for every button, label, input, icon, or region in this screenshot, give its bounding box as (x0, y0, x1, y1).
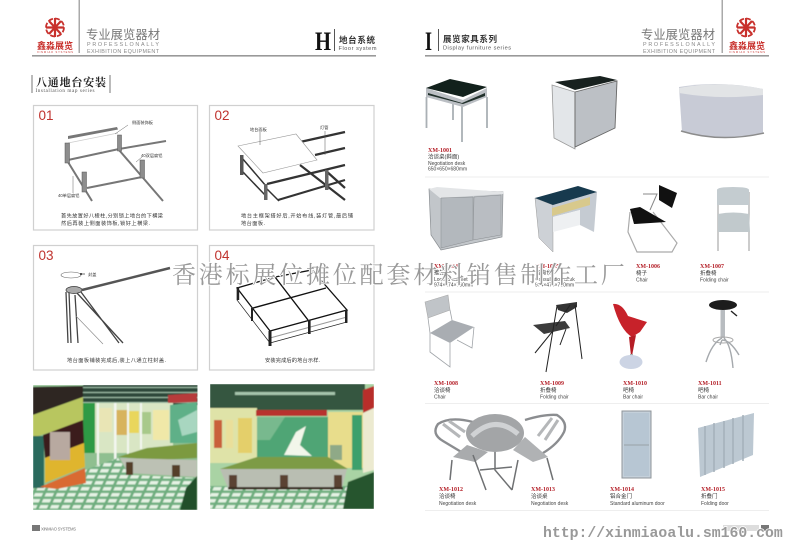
product: XM-1008 chair: XM-1008 (434, 381, 458, 387)
diagram: frame with posts (65, 125, 166, 201)
product: XM-1001 desk (426, 79, 487, 172)
product: XM-1001 desk: 650×650×680mm (428, 166, 467, 172)
panel: step 02 (210, 106, 374, 230)
product: XM-1010 bar chair: 吧椅 (623, 386, 635, 394)
product: XM-1012 and XM-1013 table with chairs: 洽谈椅 (439, 492, 456, 500)
product: XM-1014 aluminium door: Standard aluminum door (610, 501, 665, 507)
section heading: floor system: Floor system (338, 46, 377, 52)
product: XM-1012 and XM-1013 table with chairs: XM-1013 (531, 487, 555, 493)
panel: step 04: 04 (214, 248, 230, 263)
product: XM-1014 aluminium door (610, 411, 665, 507)
product: XM-1009 folding chair (533, 302, 582, 400)
heading: installation: Installation map series (36, 88, 94, 94)
product: XM-1010 bar chair: XM-1010 (623, 381, 647, 387)
panel: step 03: 地台面板铺装完成后,装上八通立柱封盖. (67, 356, 166, 364)
caption: 地台面板. (241, 219, 265, 227)
product: XM-1007 folding chair (700, 187, 750, 284)
section heading: floor system: H (315, 27, 331, 56)
section heading: display furniture: 展览家具系列 (443, 34, 497, 44)
product: XM-1001 desk: Negotiation desk (428, 161, 466, 167)
product: XM-1007 folding chair: 折叠椅 (700, 269, 717, 277)
product: XM-1010 bar chair (613, 304, 647, 400)
product: XM-1011 bar chair: XM-1011 (698, 381, 722, 387)
photo: exhibition hall with column (33, 385, 198, 510)
section heading: display furniture (425, 27, 511, 56)
caption: 地台主框架搭好后,开始布线,装灯管,最后铺 (241, 212, 353, 220)
panel: step 03: 封盖 (88, 271, 96, 277)
heading: installation (32, 75, 110, 94)
panel: step 01: 40双层扁铝 (141, 152, 162, 159)
diagram: post cap (61, 268, 170, 344)
section heading: floor system: 地台系统 (339, 35, 375, 45)
product: XM-1010 bar chair: Bar chair (623, 394, 643, 400)
caption: 然后再装上侧面装饰板,锁好上横梁. (61, 219, 150, 227)
photo: exhibition hall front view (210, 384, 374, 509)
product: XM-1015 folding door: XM-1015 (701, 487, 725, 493)
right page footer (723, 525, 769, 531)
product: XM-1001 desk: XM-1001 (428, 148, 452, 154)
panel: step 02: 地台面板 (250, 126, 268, 133)
caption: 首先放置好八棱柱,分别锁上地台的下横梁 (61, 212, 163, 220)
product: XM-1012 and XM-1013 table with chairs: Negotiation desk (531, 501, 569, 507)
product: XM-1006 chair (628, 185, 677, 284)
product: XM-1012 and XM-1013 table with chairs (435, 414, 569, 507)
product: XM-1006 chair: 椅子 (636, 269, 648, 277)
product: XM-1005 consultation desk: Consultation desk (535, 277, 575, 283)
product: XM-1005 consultation desk: XM-1005 (535, 264, 559, 270)
product: XM-1004 locker cabinet (429, 187, 504, 288)
left brand text: 专业展览器材 (86, 27, 160, 42)
product: XM-1012 and XM-1013 table with chairs: 洽谈桌 (531, 492, 548, 500)
dividers (425, 176, 769, 511)
left page footer (32, 525, 76, 532)
diagram: assembled floor (237, 270, 347, 346)
caption (241, 212, 353, 227)
left page header (32, 0, 377, 57)
icon: right logo: XINMIAO SYSTEMS (729, 50, 765, 54)
left page footer: XINMIAO SYSTEMS (41, 526, 76, 532)
panel: step 04 (210, 246, 374, 370)
product: XM-1008 chair: Chair (434, 394, 446, 400)
product: XM-1007 folding chair: XM-1007 (700, 264, 724, 270)
product: XM-1008 chair: 洽谈椅 (434, 386, 451, 394)
icon: left logo (37, 18, 73, 54)
section heading: display furniture: Display furniture series (443, 46, 511, 52)
product: XM-1005 consultation desk (535, 186, 597, 288)
watermark: factory slogan: 香港标展位摊位配套材料销售制作工厂 (172, 262, 628, 289)
icon: right logo (729, 18, 765, 54)
panel: step 04: 安装完成后的地台示样. (265, 356, 320, 364)
product: XM-1011 bar chair: Bar chair (698, 394, 718, 400)
product: XM-1009 folding chair: 折叠椅 (540, 386, 557, 394)
product: XM-1009 folding chair: XM-1009 (540, 381, 564, 387)
icon: left logo: 鑫淼展览 (37, 40, 73, 51)
product: XM-1005 consultation desk: 咨询台 (535, 268, 552, 276)
product: XM-1006 chair: XM-1006 (636, 264, 660, 270)
panel: step 03 (34, 246, 198, 370)
product: XM-1012 and XM-1013 table with chairs: XM-1012 (439, 487, 463, 493)
product: XM-1014 aluminium door: 铝合金门 (610, 492, 632, 500)
product: XM-1012 and XM-1013 table with chairs: Negotiation desk (439, 501, 477, 507)
product: XM-1006 chair: Chair (636, 278, 648, 284)
product: XM-1011 bar chair: 吧椅 (698, 386, 710, 394)
product: XM-1015 folding door (698, 413, 754, 507)
product: XM-1015 folding door: Folding door (701, 501, 729, 507)
product: XM-1001 desk: 洽谈桌(斜面) (428, 152, 459, 160)
diagram: panel on frame (238, 131, 345, 201)
panel: step 03: 03 (38, 248, 54, 263)
product: XM-1004 locker cabinet: Locked cabinet (434, 277, 468, 283)
panel: step 02: 灯管 (320, 124, 328, 131)
left brand text: PROFESSLONALLY (87, 42, 159, 48)
panel: step 01: 01 (38, 108, 54, 123)
product: XM-1015 folding door: 折叠门 (701, 492, 718, 500)
left brand text (86, 27, 160, 55)
product: XM-1009 folding chair: Folding chair (540, 394, 569, 400)
panel: step 02: 02 (214, 108, 230, 123)
product: XM-1014 aluminium door: XM-1014 (610, 487, 634, 493)
right brand text: PROFESSLONALLY (643, 42, 715, 48)
product: XM-1004 locker cabinet: 推拉柜 (434, 268, 451, 276)
icon: left logo: XINMIAO SYSTEMS (37, 50, 73, 54)
right brand text: EXHIBITION EQUIPMENT (643, 49, 716, 55)
panel: step 01: 侧面装饰板 (132, 119, 154, 126)
product: XM-1007 folding chair: Folding chair (700, 278, 729, 284)
icon: right logo: 鑫淼展览 (729, 40, 765, 51)
right brand text (641, 27, 716, 55)
right brand text: 专业展览器材 (641, 27, 715, 42)
left brand text: EXHIBITION EQUIPMENT (87, 49, 160, 55)
product: XM-1011 bar chair (698, 300, 739, 400)
panel: step 01: 40单层扁铝 (58, 192, 79, 199)
product: counter (552, 76, 617, 149)
caption (61, 212, 163, 227)
heading: installation: 八通地台安装 (36, 75, 106, 89)
product: curved counter (679, 84, 764, 138)
section heading: display furniture: I (425, 27, 432, 56)
right page header (425, 0, 769, 57)
product: XM-1004 locker cabinet: 974×474×760mm (434, 282, 473, 288)
panel: step 01 (34, 106, 198, 230)
product: XM-1004 locker cabinet: XM-1004 (434, 264, 458, 270)
watermark: website url: http://xinmiaoalu.sm160.com (543, 526, 783, 542)
product: XM-1005 consultation desk: 974×474×760mm (535, 282, 574, 288)
product: XM-1008 chair (425, 295, 474, 400)
section heading: floor system (315, 27, 377, 56)
